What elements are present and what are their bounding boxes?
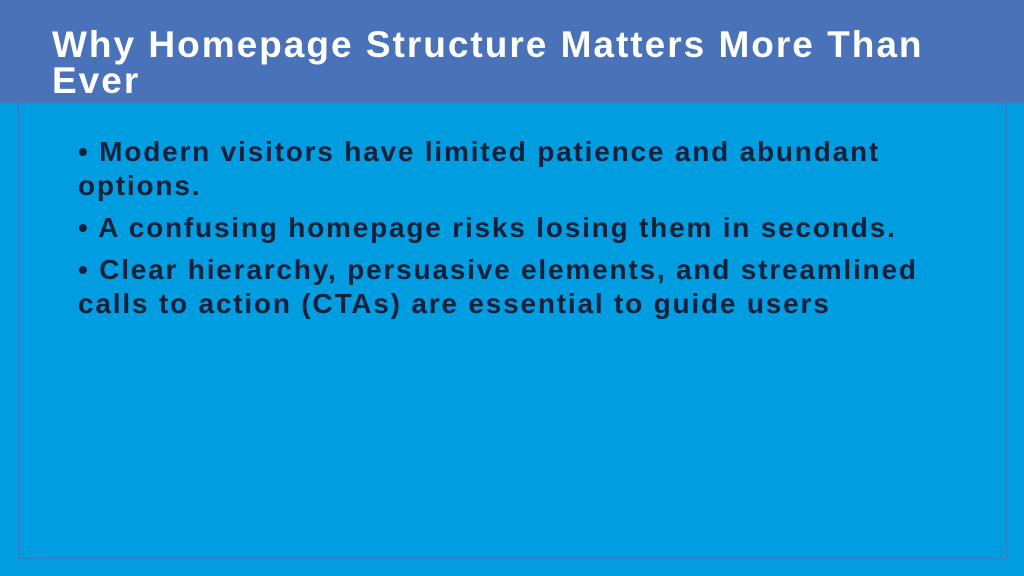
content frame [18, 103, 1007, 559]
title: Why Homepage Structure Matters More Than Ever [52, 24, 924, 101]
bullet list: • Modern visitors have limited patience and abundant options. [78, 136, 880, 201]
bullet list: • A confusing homepage risks losing them in seconds. [78, 212, 897, 243]
bullet list [78, 136, 918, 319]
bullet list: • Clear hierarchy, persuasive elements, and streamlined calls to action (CTAs) are essential to guide users [78, 254, 918, 319]
header band [0, 0, 1024, 103]
